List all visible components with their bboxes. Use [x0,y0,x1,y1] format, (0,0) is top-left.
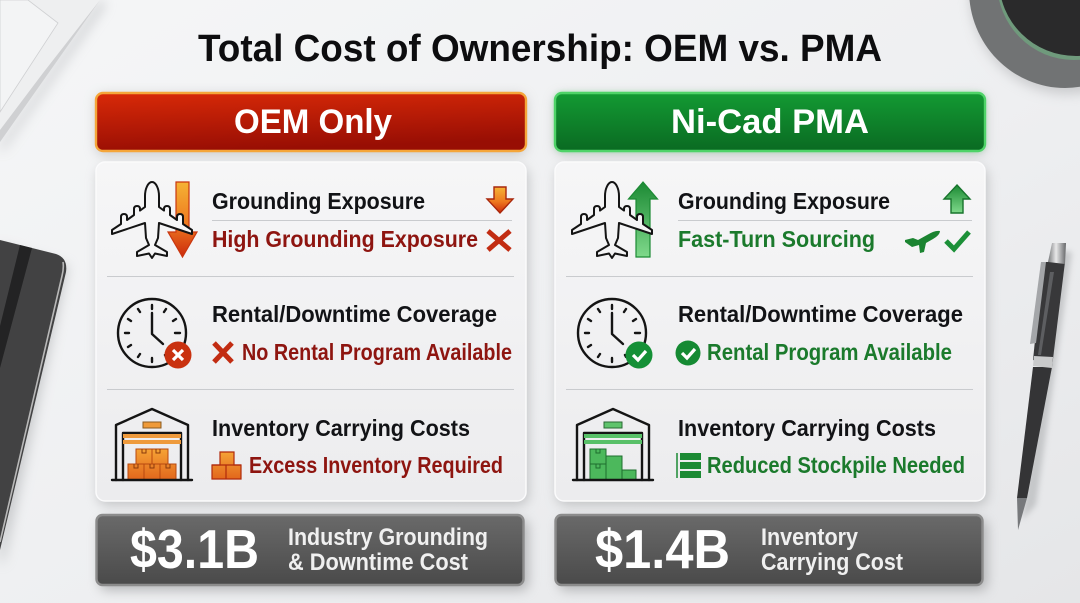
stat: $1.4B: Inventory [761,524,859,551]
row: grounding exposure OEM: High Grounding Exposure [212,226,478,252]
header: Ni-Cad PMA [555,93,985,155]
stat: $3.1B [96,515,528,590]
row: grounding exposure PMA: Fast-Turn Sourcing [678,226,875,252]
row: inventory OEM [112,409,503,480]
row: grounding exposure OEM: Grounding Exposure [212,188,425,214]
row: rental coverage PMA: Rental Program Available [707,339,952,365]
panel: PMA criteria [555,162,987,505]
icon: small plane [905,231,940,253]
row: rental coverage OEM: Rental/Downtime Coverage [212,301,497,327]
row: rental coverage PMA [578,299,963,368]
icon: warehouse with orange boxes [112,409,192,480]
icon: plane with up arrow [572,182,658,258]
icon: plane with down arrow [112,182,197,258]
row: inventory OEM: Inventory Carrying Costs [212,415,470,441]
row: rental coverage OEM [118,299,512,368]
title: Total Cost of Ownership: OEM vs. PMA [198,28,882,70]
speaker device [969,0,1080,94]
icon: green check [946,232,969,249]
icon: warehouse with green boxes [573,409,653,480]
icon: stockpile list [677,453,701,478]
pen [1017,243,1072,530]
icon: green check badge [676,340,700,366]
laptop corner [0,0,106,152]
column: OEM Only [96,93,528,590]
notebook [0,240,68,565]
panel: OEM criteria [96,162,528,505]
icon: clock with red badge [118,299,192,368]
row: inventory PMA: Inventory Carrying Costs [678,415,936,441]
stat: $1.4B [556,515,987,590]
row: grounding exposure PMA [572,182,972,258]
row: inventory PMA [573,409,965,480]
stat: $1.4B: Carrying Cost [761,549,903,576]
stat: $3.1B: $3.1B [130,518,259,580]
column: Ni-Cad PMA [555,93,987,590]
stat: $1.4B: $1.4B [595,518,730,580]
header: OEM Only [96,93,526,155]
icon: small up arrow [944,185,970,213]
header: Ni-Cad PMA: Ni-Cad PMA [671,103,869,141]
row: rental coverage PMA: Rental/Downtime Coverage [678,301,963,327]
icon: red cross [214,343,232,362]
row: inventory PMA: Reduced Stockpile Needed [707,452,965,478]
stat: $3.1B: & Downtime Cost [288,549,468,576]
icon: stacked boxes [212,452,241,479]
row: rental coverage OEM: No Rental Program Available [242,339,512,365]
row: grounding exposure OEM [112,182,513,258]
header: OEM Only: OEM Only [234,103,392,141]
stat: $3.1B: Industry Grounding [288,524,488,551]
icon: small down arrow [487,187,513,213]
row: grounding exposure PMA: Grounding Exposure [678,188,890,214]
icon: clock with green badge [578,299,652,368]
icon: red cross [488,231,510,250]
row: inventory OEM: Excess Inventory Required [249,452,503,478]
